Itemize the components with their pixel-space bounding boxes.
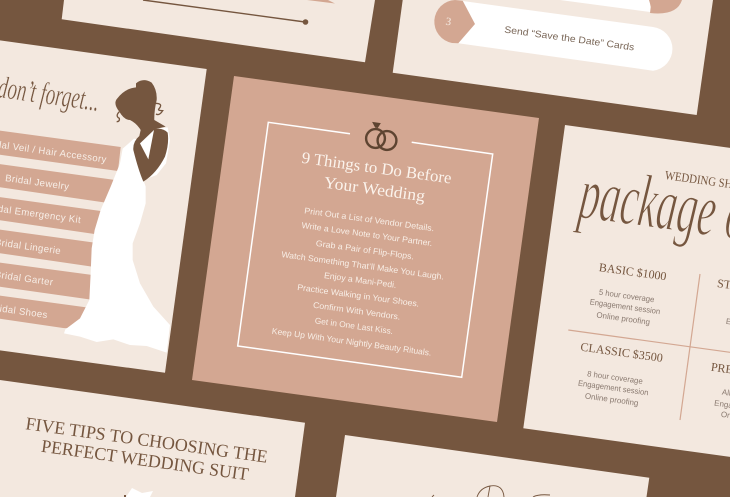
- package: classic: [577, 340, 664, 408]
- step label: Send “Save the Date” Cards: [504, 25, 635, 53]
- panel: 9 things center card: [192, 76, 539, 422]
- list of nine things: Confirm With Vendors.: [312, 300, 401, 322]
- curls: [117, 103, 163, 122]
- package: standard (cropped): [716, 276, 730, 332]
- checklist row 3: [434, 0, 672, 71]
- package: basic: [589, 260, 667, 327]
- panel: package options: [523, 125, 730, 459]
- checklist row fragment above: [560, 0, 682, 13]
- package: basic: 5 hour coverage: [598, 288, 656, 304]
- package: classic: Online proofing: [584, 391, 639, 408]
- script heading fragment: [432, 486, 550, 497]
- icon: wedding rings: [366, 122, 396, 150]
- list of nine things: Print Out a List of Vendor Details.: [304, 205, 435, 233]
- list of nine things: Practice Walking in Your Shoes.: [297, 282, 420, 309]
- icon: bow tie fragment: [124, 488, 153, 497]
- card title: Your Wedding: [323, 173, 426, 205]
- list bars: [0, 130, 130, 328]
- panel: don't forget list: [0, 39, 207, 373]
- list of nine things: [271, 205, 445, 358]
- package: classic: Engagement session: [577, 379, 649, 397]
- list of nine things: Grab a Pair of Flip-Flops.: [315, 238, 415, 261]
- script heading: don’t forget...: [0, 69, 102, 118]
- list of nine things: Watch Something That’ll Make You Laugh.: [281, 249, 445, 282]
- card title: 9 Things to Do Before: [301, 148, 453, 187]
- package: classic: 8 hour coverage: [587, 369, 644, 386]
- head, hair and arm: [115, 80, 168, 182]
- package: premium (cropped): [710, 360, 730, 422]
- package: basic: Engagement session: [589, 297, 661, 316]
- rose shape fragment: [307, 0, 335, 4]
- panel: top left card fragment: [62, 0, 375, 62]
- panel: bottom card fragment: [336, 435, 649, 497]
- list of nine things: Write a Love Note to Your Partner.: [301, 220, 433, 248]
- package: classic: CLASSIC $3500: [580, 340, 664, 365]
- bride silhouette: [64, 80, 170, 353]
- neckline: [140, 130, 154, 159]
- panel: five tips suit card: [0, 379, 305, 497]
- package: basic: BASIC $1000: [598, 260, 667, 283]
- list of nine things: Keep Up With Your Nightly Beauty Rituals.: [271, 326, 432, 358]
- white frame: [238, 122, 493, 377]
- card heading: PERFECT WEDDING SUIT: [40, 436, 250, 484]
- package: basic: Online proofing: [596, 310, 651, 327]
- card heading: FIVE TIPS TO CHOOSING THE: [24, 413, 269, 467]
- grid dividers: [568, 330, 730, 354]
- timeline line with dot: [143, 0, 308, 25]
- panel: top right checklist card: [393, 0, 713, 115]
- list labels: [0, 138, 107, 321]
- step number: 3: [445, 16, 452, 28]
- list of nine things: Enjoy a Mani-Pedi.: [323, 270, 397, 290]
- list labels: Bridal Jewelry: [4, 173, 70, 193]
- list of nine things: Get in One Last Kiss.: [314, 315, 394, 336]
- card title: [301, 148, 453, 205]
- dress: [64, 127, 170, 353]
